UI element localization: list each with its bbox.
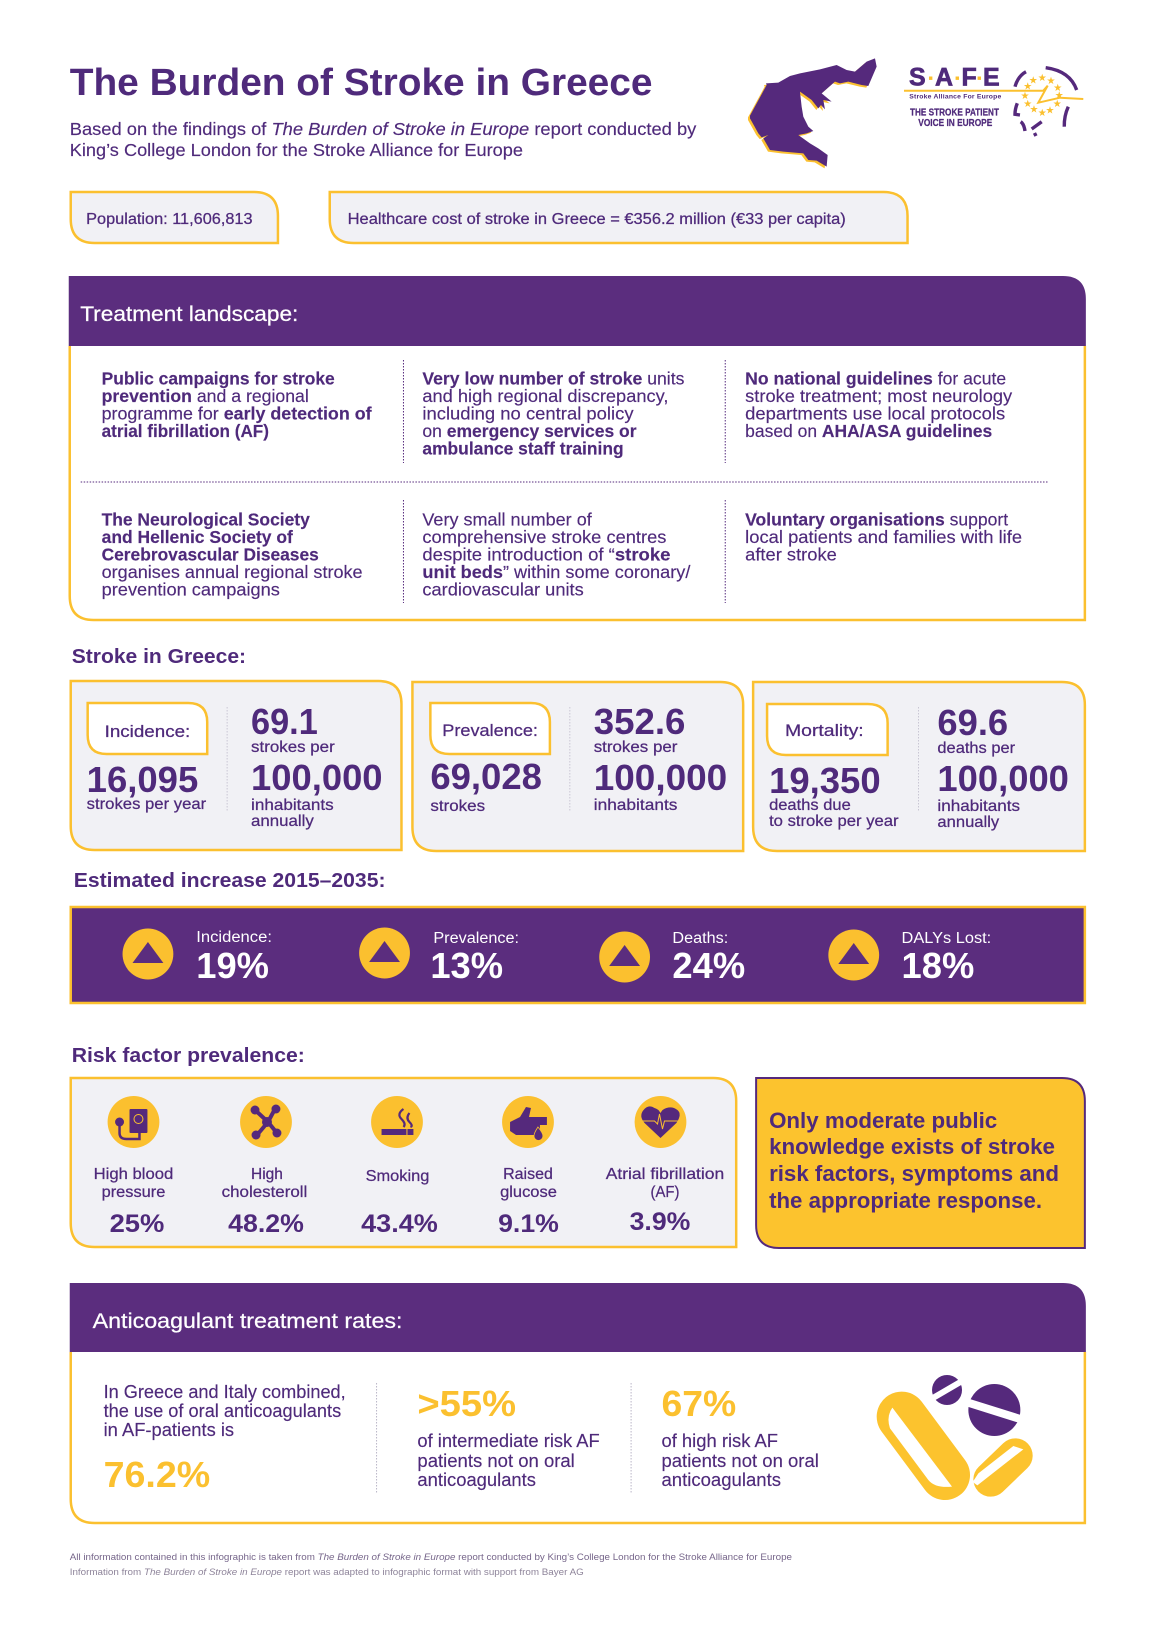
text: national guidelines — [745, 368, 1012, 441]
text: stroke units: including no central policy — [422, 403, 634, 424]
risk: atrial fibrillation: Atrial fibrillation — [606, 1166, 724, 1183]
card: prevalence: inhabitants — [594, 797, 677, 814]
text: neurological society: prevention campaigns — [102, 579, 280, 600]
logo: SAFE: ★ — [1046, 105, 1055, 117]
card: prevalence — [412, 682, 743, 851]
stat box: population: Population: 11,606,813 — [86, 211, 253, 228]
risk: high cholesterol: 48.2% — [228, 1210, 304, 1238]
stat: incidence increase — [123, 928, 272, 986]
text: stroke units: Very low number of stroke units — [422, 368, 685, 389]
text: national guidelines: No national guidelines for acute — [745, 368, 1006, 389]
risk: raised glucose: Raised — [503, 1166, 553, 1183]
risk: raised glucose — [498, 1096, 559, 1238]
card: mortality: Mortality: — [785, 721, 864, 740]
panel header: treatment landscape: Treatment landscape: — [80, 303, 298, 326]
stat: high risk — [661, 1383, 819, 1490]
text: voluntary organisations: Voluntary organisations support — [745, 509, 1008, 530]
logo: SAFE: ★ — [1047, 76, 1056, 87]
logo: SAFE: ★ — [1023, 81, 1032, 93]
card: incidence: 100,000 — [251, 757, 383, 798]
logo: SAFE — [904, 64, 1083, 136]
text: stroke units: and high regional discrepancy, — [422, 386, 668, 406]
card: prevalence: 100,000 — [594, 757, 727, 798]
logo: SAFE: S — [909, 64, 926, 92]
card: prevalence: Prevalence: — [442, 721, 538, 740]
text: national guidelines: departments use local protocols — [745, 403, 1005, 424]
card: incidence: 16,095 — [87, 759, 198, 800]
text: comprehensive stroke centres: Very small number of — [422, 509, 592, 530]
card: mortality: 19,350 — [769, 760, 881, 801]
panel: risk factors — [71, 1078, 736, 1247]
stat: high risk: anticoagulants — [661, 1469, 781, 1490]
stat: deaths increase — [599, 930, 745, 986]
logo: SAFE: ★ — [1055, 90, 1064, 102]
heading: stroke in Greece: Stroke in Greece: — [72, 646, 246, 668]
text: national guidelines: based on AHA/ASA guidelines — [745, 421, 992, 441]
stat: intermediate risk: >55% — [417, 1383, 516, 1424]
card: mortality: deaths per — [937, 740, 1016, 757]
card: mortality: to stroke per year — [769, 813, 899, 830]
text: voluntary organisations — [745, 509, 1022, 565]
card: incidence: annually — [251, 813, 314, 830]
text: neurological society — [102, 509, 363, 600]
text: neurological society: The Neurological Society — [102, 509, 310, 530]
risk: raised glucose: glucose — [500, 1184, 557, 1201]
card: prevalence: strokes — [430, 798, 485, 815]
text: stroke units: on emergency services or — [422, 421, 637, 441]
subtitle — [70, 119, 697, 160]
risk: high blood pressure: 25% — [110, 1210, 164, 1238]
logo: SAFE: Stroke Alliance For Europe — [909, 93, 1002, 100]
logo: SAFE: ★ — [1029, 75, 1038, 87]
stat: high risk: 67% — [661, 1383, 736, 1424]
logo: SAFE: VOICE IN EUROPE — [918, 118, 993, 129]
risk: atrial fibrillation — [606, 1096, 724, 1236]
stat box: healthcare cost: Healthcare cost of stroke in Greece = €356.2 million (€33 per capita) — [348, 211, 846, 228]
logo: SAFE: ★ — [1053, 99, 1062, 110]
callout: public knowledge: the appropriate response. — [769, 1188, 1042, 1213]
card: incidence: Incidence: — [105, 722, 190, 741]
card: mortality — [753, 682, 1085, 851]
stat: deaths increase: 24% — [672, 945, 745, 986]
risk: high blood pressure: pressure — [102, 1184, 165, 1201]
card: incidence: strokes per — [251, 739, 335, 756]
panel: anticoagulant treatment rates — [70, 1283, 1086, 1523]
footer notes: Information from The Burden of Stroke in Europe report was adapted to infographic format with support from Bayer AG — [70, 1567, 584, 1578]
stat: oral anticoagulant use: in AF-patients is — [104, 1419, 234, 1440]
stat: DALYs lost increase: DALYs Lost: — [902, 930, 991, 947]
stat: high risk: patients not on oral — [661, 1450, 819, 1471]
stat: intermediate risk: of intermediate risk AF — [417, 1430, 600, 1451]
stat: intermediate risk — [417, 1383, 600, 1490]
text: neurological society: organises annual regional stroke — [102, 562, 363, 582]
stat: DALYs lost increase: 18% — [902, 945, 974, 986]
stat: oral anticoagulant use — [104, 1381, 346, 1495]
text: public campaigns — [102, 368, 372, 441]
text: neurological society: and Hellenic Society of — [102, 527, 293, 547]
stat: intermediate risk: patients not on oral — [417, 1450, 575, 1471]
callout: public knowledge: knowledge exists of stroke — [769, 1134, 1055, 1159]
card: incidence: inhabitants — [251, 797, 334, 814]
card: incidence: 69.1 — [251, 701, 318, 742]
heading: estimated increase: Estimated increase 2015–2035: — [74, 870, 386, 892]
card: mortality: 69.6 — [937, 702, 1008, 743]
text: national guidelines: stroke treatment; most neurology — [745, 386, 1012, 406]
risk: smoking: 43.4% — [361, 1210, 438, 1238]
card: incidence: strokes per year — [87, 796, 207, 813]
text: stroke units — [422, 368, 685, 459]
logo: SAFE: THE STROKE PATIENT — [910, 108, 999, 119]
card: mortality: deaths due — [769, 797, 851, 814]
risk: high cholesterol — [222, 1096, 307, 1238]
icon: pills — [888, 1375, 1023, 1487]
stat: deaths increase: Deaths: — [672, 930, 728, 947]
stat: prevalence increase: Prevalence: — [433, 930, 519, 947]
stat: prevalence increase: 13% — [430, 945, 503, 986]
stat: incidence increase: Incidence: — [196, 929, 272, 946]
logo: SAFE: ★ — [1021, 91, 1030, 102]
logo: SAFE: ★ — [1038, 108, 1047, 119]
risk: high cholesterol: cholesteroll — [222, 1184, 307, 1201]
stat: DALYs lost increase — [828, 930, 991, 986]
heading: risk factor prevalence: Risk factor prevalence: — [72, 1045, 305, 1067]
card: mortality: inhabitants — [937, 798, 1020, 815]
logo: SAFE: ★ — [1030, 104, 1039, 116]
text: comprehensive stroke centres: unit beds” within some coronary/ — [422, 562, 691, 582]
footer notes: All information contained in this infographic is taken from The Burden of Stroke in Europe report conducted by King’s College London for the Stroke Alliance for Europe — [70, 1552, 792, 1563]
risk: high blood pressure: High blood — [94, 1166, 173, 1183]
card: mortality: annually — [937, 814, 999, 831]
stat: oral anticoagulant use: In Greece and Italy combined, — [104, 1381, 346, 1402]
logo: SAFE: ★ — [1053, 83, 1062, 94]
stat: oral anticoagulant use: 76.2% — [104, 1454, 210, 1495]
text: comprehensive stroke centres — [422, 509, 691, 600]
card: prevalence: 352.6 — [594, 701, 685, 742]
risk: atrial fibrillation: (AF) — [651, 1184, 679, 1201]
risk: high blood pressure — [94, 1096, 173, 1238]
logo: SAFE: A — [935, 64, 953, 92]
panel: estimated increase band — [71, 907, 1085, 1003]
stat: high risk: of high risk AF — [661, 1430, 778, 1451]
stat: incidence increase: 19% — [196, 945, 269, 986]
callout: public knowledge: Only moderate public — [769, 1108, 997, 1133]
card: prevalence: strokes per — [594, 739, 678, 756]
callout: public knowledge: risk factors, symptoms and — [769, 1161, 1059, 1186]
risk: smoking — [361, 1096, 438, 1238]
text: public campaigns: programme for early detection of — [102, 403, 372, 424]
card: incidence — [71, 681, 401, 850]
logo: SAFE: E — [983, 64, 1000, 92]
stat box: healthcare cost — [330, 192, 908, 243]
stat: prevalence increase — [359, 928, 519, 986]
logo: SAFE: ★ — [1038, 73, 1047, 84]
logo: SAFE: F — [961, 64, 977, 92]
text: public campaigns: prevention and a regional — [102, 386, 309, 406]
text: comprehensive stroke centres: despite introduction of “ stroke — [422, 544, 671, 565]
panel header: anticoagulant: Anticoagulant treatment rates: — [93, 1310, 402, 1333]
text: stroke units: ambulance staff training — [422, 438, 624, 459]
callout: public knowledge — [756, 1078, 1085, 1248]
footer notes — [70, 1552, 792, 1578]
risk: atrial fibrillation: 3.9% — [630, 1208, 690, 1236]
text: public campaigns: atrial fibrillation (AF) — [102, 421, 269, 441]
text: voluntary organisations: local patients and families with life — [745, 527, 1022, 547]
icon: map of Greece — [748, 58, 877, 168]
text: voluntary organisations: after stroke — [745, 544, 837, 565]
panel: treatment landscape — [69, 276, 1086, 620]
risk: high cholesterol: High — [251, 1166, 283, 1183]
stat: intermediate risk: anticoagulants — [417, 1469, 536, 1490]
card: prevalence: 69,028 — [430, 756, 542, 797]
text: public campaigns: Public campaigns for stroke — [102, 368, 335, 389]
title: The Burden of Stroke in Greece — [70, 62, 653, 104]
panel header: treatment landscape — [69, 276, 1086, 346]
subtitle: Based on the findings of The Burden of Stroke in Europe report conducted by — [70, 119, 697, 139]
risk: smoking: Smoking — [366, 1168, 429, 1185]
text: neurological society: Cerebrovascular Diseases — [102, 544, 319, 565]
stat: oral anticoagulant use: the use of oral anticoagulants — [104, 1400, 341, 1421]
stat box: population — [71, 192, 278, 243]
text: comprehensive stroke centres: comprehensive stroke centres — [422, 527, 667, 547]
panel header: anticoagulant — [70, 1283, 1086, 1352]
risk: raised glucose: 9.1% — [498, 1210, 559, 1238]
subtitle: King’s College London for the Stroke Alliance for Europe — [70, 140, 523, 160]
logo: SAFE: ★ — [1023, 99, 1032, 110]
card: mortality: 100,000 — [937, 758, 1069, 799]
text: comprehensive stroke centres: cardiovascular units — [422, 579, 584, 600]
